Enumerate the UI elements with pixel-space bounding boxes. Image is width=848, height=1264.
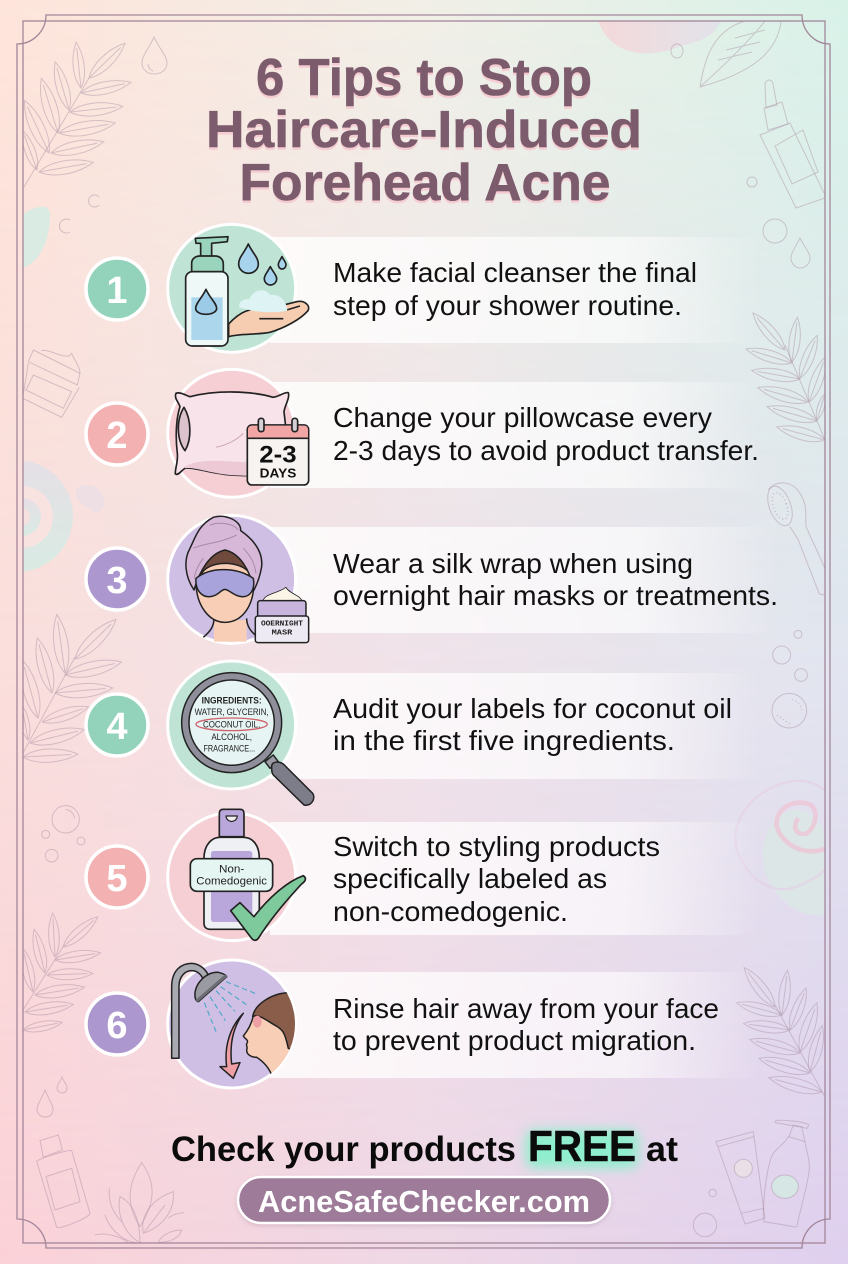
- tip 6 number badge: 6: [106, 1005, 128, 1047]
- tip 5 text: [333, 831, 660, 927]
- icon: magnifier over ingredients: COCONUT OIL,: [203, 719, 260, 729]
- tip 4 text: in the first five ingredients.: [333, 725, 675, 756]
- icon: magnifier over ingredients: FRAGRANCE...: [203, 744, 255, 754]
- tip 3: [86, 515, 780, 643]
- tip 4 band: [270, 673, 760, 779]
- title: Haircare-Induced: [206, 101, 642, 159]
- icon: pillow and calendar: [168, 369, 309, 497]
- tip 3 band: [270, 527, 780, 633]
- icon: non-comedogenic bottle and check mark: Comedogenic: [196, 876, 267, 888]
- tip 4 text: Audit your labels for coconut oil: [333, 693, 732, 724]
- footer call to action: [171, 1122, 678, 1225]
- website button: [238, 1177, 610, 1225]
- tip 2 text: Change your pillowcase every: [333, 402, 712, 433]
- tip 2 number badge: 2: [106, 415, 128, 457]
- icon: foaming cleanser and hand: [168, 224, 309, 352]
- tip 5 number badge: [86, 846, 148, 908]
- tip 6 text: [333, 993, 719, 1056]
- tip 5 number badge: 5: [106, 858, 128, 900]
- swirl: left: [24, 460, 104, 572]
- tip 1: [86, 224, 760, 352]
- bubbles: right middle: [772, 630, 807, 728]
- blob: left teal: [23, 207, 50, 268]
- title: Forehead Acne: [240, 154, 610, 212]
- tip 6: [86, 960, 760, 1088]
- icon: magnifier over ingredients: WATER, GLYCERIN,: [195, 707, 269, 717]
- tip 5 text: Switch to styling products: [333, 831, 660, 862]
- drop: top: [142, 37, 167, 74]
- branch: left lower: [18, 913, 101, 1035]
- tubes: bottom right: [693, 1120, 809, 1237]
- website button: AcneSafeChecker.com: [258, 1184, 590, 1219]
- icon: towel wrap, sleep mask and jar: OOERNIGHT: [261, 621, 303, 629]
- bubbles: upper: [671, 44, 683, 58]
- icon: towel wrap, sleep mask and jar: [168, 515, 309, 643]
- tip 6 number badge: [86, 993, 148, 1055]
- icon: pillow and calendar: 2-3: [259, 442, 297, 469]
- swirl: right: [735, 781, 826, 916]
- leaf: top right: [700, 21, 781, 87]
- icon: pillow and calendar: DAYS: [260, 466, 297, 481]
- icon: magnifier over ingredients: ALCOHOL,: [211, 732, 252, 742]
- tip 4: [86, 661, 760, 805]
- blob: top right: [598, 21, 720, 53]
- tip 3 number badge: [86, 548, 148, 610]
- title: Forehead Acne: [240, 156, 610, 214]
- icon: shower rinse away from face: [168, 960, 300, 1088]
- title: 6 Tips to Stop: [256, 49, 592, 107]
- tip 3 number badge: 3: [106, 560, 128, 602]
- call to action text: [171, 1122, 678, 1171]
- tip 2 text: [333, 402, 759, 466]
- branch: right upper: [745, 312, 824, 442]
- call to action text: at: [646, 1130, 678, 1169]
- call to action text: Check your products: [171, 1130, 516, 1169]
- tip 4 number badge: 4: [106, 706, 128, 748]
- icon: towel wrap, sleep mask and jar: MASR: [272, 630, 293, 638]
- tip 1 number badge: [86, 258, 148, 320]
- tip 3 text: overnight hair masks or treatments.: [333, 580, 778, 611]
- tip 5 text: specifically labeled as: [333, 863, 607, 894]
- title: 6 Tips to Stop: [256, 51, 592, 109]
- tip 1 number badge: 1: [106, 270, 128, 312]
- icon: magnifier over ingredients: [168, 661, 314, 805]
- branch: right lower: [735, 964, 828, 1098]
- title: Haircare-Induced: [206, 103, 642, 161]
- tip 2 number badge: [86, 403, 148, 465]
- tip 4 number badge: [86, 694, 148, 756]
- drops: left lower: [37, 1077, 67, 1117]
- branch: top left: [18, 39, 132, 187]
- call to action text: FREE: [528, 1122, 636, 1171]
- tip 1 text: step of your shower routine.: [333, 290, 682, 321]
- icon: non-comedogenic bottle and check mark: Non-: [219, 863, 245, 875]
- tip 6 text: Rinse hair away from your face: [333, 993, 719, 1024]
- bottle: left lower: [37, 1135, 90, 1228]
- tip 2: [86, 369, 760, 497]
- free glow: [526, 1130, 638, 1168]
- bubbles: left lower: [42, 806, 85, 862]
- tip 5 text: non-comedogenic.: [333, 896, 568, 927]
- bottle: spray: [760, 80, 825, 208]
- tip 5 band: [270, 822, 760, 935]
- tip 5: [86, 809, 760, 941]
- tip 2 band: [270, 382, 760, 488]
- icon: non-comedogenic bottle and check mark: [168, 809, 305, 941]
- branch: left middle: [16, 614, 123, 764]
- tip 6 text: to prevent product migration.: [333, 1025, 696, 1056]
- icon: magnifier over ingredients: INGREDIENTS:: [202, 695, 262, 705]
- tip 1 text: Make facial cleanser the final: [333, 257, 697, 288]
- plant: bottom: [95, 1163, 184, 1243]
- tip 3 text: Wear a silk wrap when using: [333, 548, 693, 579]
- drop: right: [791, 238, 810, 268]
- tip 2 text: 2-3 days to avoid product transfer.: [333, 435, 759, 466]
- shower head: right: [763, 483, 825, 595]
- tip 6 band: [270, 972, 760, 1078]
- tip 1 text: [333, 257, 697, 321]
- tip 1 band: [270, 237, 760, 343]
- jar: left: [23, 350, 80, 417]
- tip 3 text: [333, 548, 778, 611]
- tip 4 text: [333, 693, 732, 756]
- title: [206, 49, 642, 214]
